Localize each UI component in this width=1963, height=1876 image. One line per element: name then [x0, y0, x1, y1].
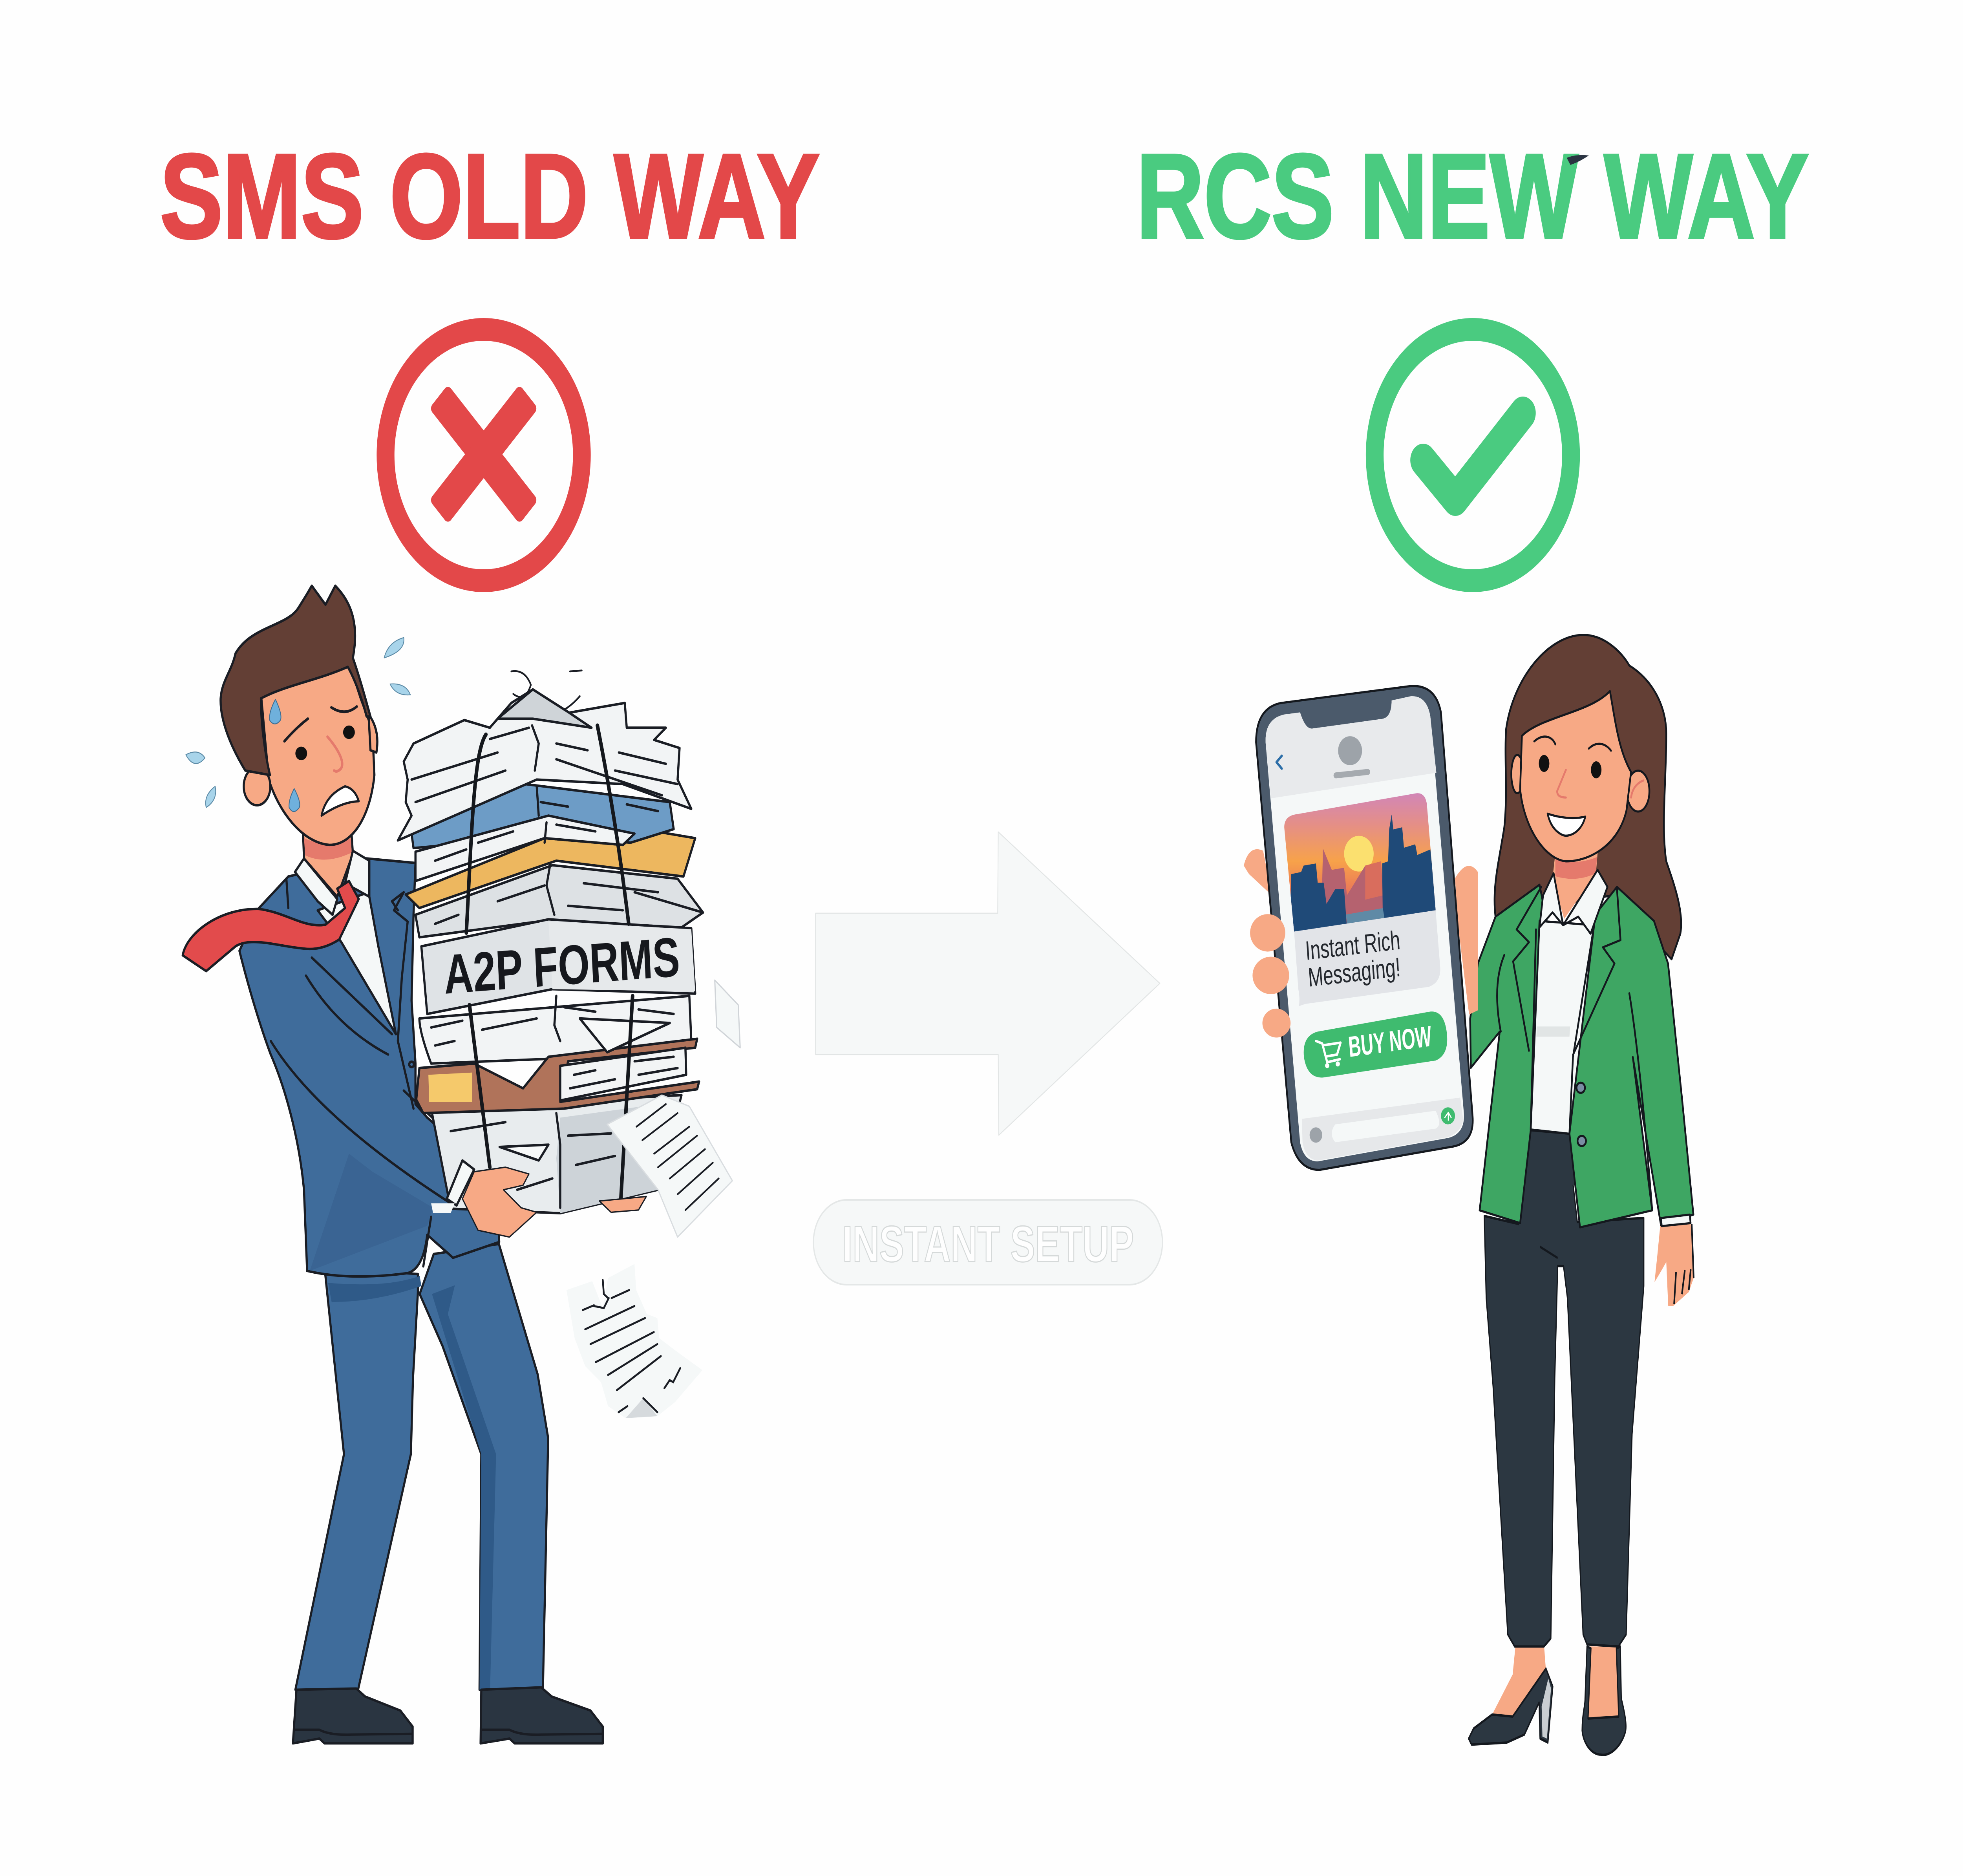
ears: [1512, 755, 1523, 793]
woman upper body: [1244, 635, 1693, 1227]
title: RCS new way: RCS NEW WAY: [1137, 129, 1809, 263]
title: SMS old way: SMS OLD WAY: [160, 129, 819, 263]
neck: [1553, 853, 1597, 919]
falling paper: [567, 1264, 702, 1418]
shirt and collar: [318, 892, 396, 1034]
arrow: transition: [815, 832, 1160, 1135]
hands and cuff: [447, 1161, 474, 1205]
text: instant rich messaging: [1304, 925, 1402, 992]
phone: [1256, 686, 1473, 1170]
trousers top: [1510, 1125, 1587, 1185]
stack lines: [411, 728, 703, 1190]
paper stack: [431, 1095, 682, 1213]
face: [295, 747, 307, 760]
label: instant setup pill: INSTANT SETUP: [842, 1215, 1134, 1273]
rich message image: [1281, 789, 1439, 934]
cart icon: [1316, 1041, 1341, 1062]
illustration: stressed man with paper stack: [183, 586, 740, 1743]
front fingers: [1250, 914, 1285, 952]
icon: red cross in circle: [386, 329, 582, 581]
loose papers: [607, 1095, 732, 1237]
icon: green check in circle: [1375, 329, 1571, 581]
jacket: [1470, 885, 1693, 1227]
sweat drops: [269, 699, 281, 724]
face: [1520, 691, 1631, 861]
jacket buttons: [1577, 1082, 1585, 1093]
man legs and shoes: [293, 1244, 603, 1743]
illustration: happy woman with phone: [1244, 635, 1694, 1755]
man upper body, head and paper stack: [183, 586, 740, 1276]
text: A2P FORMS: A2P FORMS: [442, 925, 681, 1006]
input bar: [1302, 1097, 1463, 1161]
text: instant rich messaging: Messaging!: [1307, 952, 1402, 992]
shirt: [1531, 921, 1594, 1134]
red tie: [183, 881, 359, 971]
text bubble: [1294, 910, 1440, 1006]
head: [261, 662, 375, 845]
woman legs and shoes: [1469, 1178, 1694, 1755]
buy now button: [1304, 1011, 1447, 1078]
suit jacket: [239, 858, 499, 1276]
back hand fingers: [1244, 849, 1272, 895]
hair: [1495, 635, 1681, 959]
text: instant rich messaging: Instant Rich: [1304, 925, 1401, 965]
neck: [303, 825, 353, 897]
text: buy now: BUY NOW: [1347, 1020, 1433, 1064]
A2P label: [421, 919, 695, 1014]
label: instant setup pill: [813, 1200, 1162, 1285]
hair: [221, 586, 371, 775]
shirt cuff: [1661, 1214, 1691, 1226]
straps: [466, 726, 632, 1199]
lapels: [1497, 887, 1652, 1210]
